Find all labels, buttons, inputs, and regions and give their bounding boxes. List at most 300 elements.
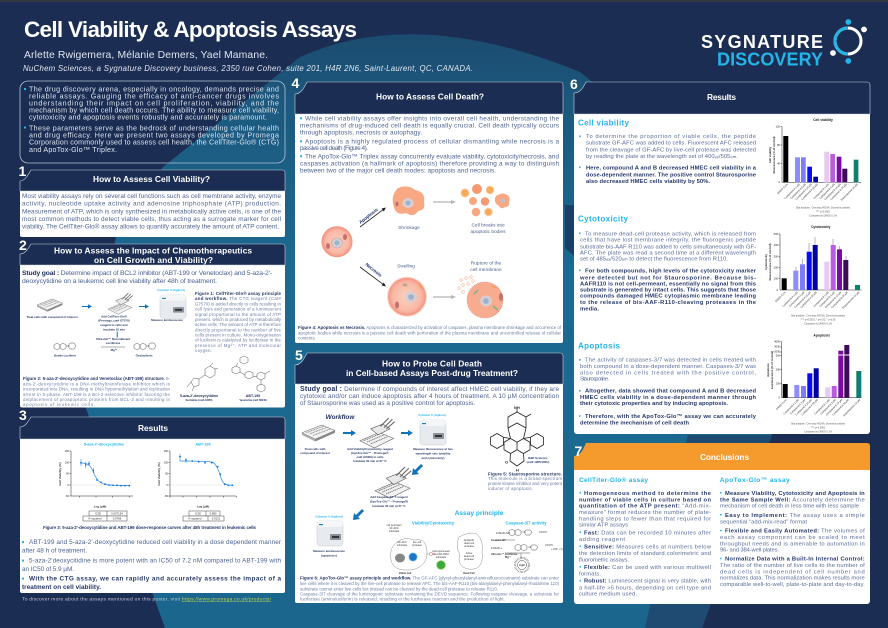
cytotoxicity text: AFC. The plate was read a second time at a different wavelength xyxy=(580,251,756,257)
cytotoxicity text xyxy=(579,231,757,312)
apoptosis text xyxy=(579,358,757,426)
figure 4 caption: contents. xyxy=(298,336,316,341)
bar chart: cytotoxicity: Compound B 1 µM xyxy=(813,291,830,308)
cell viability heading: Cell viability xyxy=(578,118,630,128)
authors: Arlette Rwigemera, Mélanie Demers, Yael Mamane. xyxy=(24,50,268,61)
bar chart: cell viability: 80 xyxy=(777,143,781,147)
gray arrow xyxy=(433,295,456,299)
bar chart: cytotoxicity: Staurosporine 10 µM xyxy=(842,291,860,310)
figure 1 caption: active cells. The amount of ATP is therefore xyxy=(195,322,282,327)
bar chart: cytotoxicity: Compared to DMSO 0.1% xyxy=(804,322,833,326)
panel 5 heading xyxy=(346,358,518,378)
assay principle heading: Assay principle xyxy=(455,510,504,517)
cytotoxicity text: For both compounds, high levels of the cytotoxicity marker xyxy=(585,268,757,274)
figure 1 caption: directly proportional to the number of live xyxy=(195,327,282,332)
logo wordmark: SYGNATURE xyxy=(701,32,823,52)
apotox-glo list: 96- and 384-well plates. xyxy=(720,548,779,554)
bar chart: apoptosis: Compound A 10 µM xyxy=(795,399,813,416)
panel 1 text xyxy=(22,193,281,231)
celltiter-glo list: Fast: Data can be recorded 10 minutes after xyxy=(584,530,711,536)
panel 4 text: passive cell death (Figure 4). xyxy=(300,145,368,152)
panel 1: how to assess cell viability xyxy=(18,163,285,237)
dead cell labels xyxy=(432,539,475,575)
panel 2 header xyxy=(20,244,285,265)
shrinkage label: Shrinkage xyxy=(398,225,420,231)
figure 1 caption: signal proportional to the amount of ATP xyxy=(195,312,281,317)
bar chart: apoptosis: Compound B 30 µM xyxy=(832,399,850,416)
structure labels: Venetoclax (cat# S8048) xyxy=(239,399,267,402)
panel 4: how to assess cell death xyxy=(292,75,563,343)
intro text: reliable assays. Gauging the efficacy of anti-cancer drugs involves xyxy=(29,93,279,101)
cytotoxicity text: to the release of bis-AAF-R110-cleaving proteases in the xyxy=(580,300,757,306)
live cell labels: GF-AFC xyxy=(389,527,399,530)
structure atoms xyxy=(505,405,520,472)
bar chart: apoptosis: 0 xyxy=(779,396,781,400)
celltiter-glo heading: CellTiter-Glo® assay xyxy=(579,476,648,484)
assay principle figure xyxy=(386,510,563,575)
robot icon xyxy=(108,293,133,314)
staurosporine structure xyxy=(490,405,549,472)
bar chart: cytotoxicity: DMSO 0.1% xyxy=(775,291,787,303)
figure 6 caption: substrate cannot enter live cells but instead can be cleaved by the dead-cell protease to release R110. xyxy=(300,587,498,592)
figure 1 caption: cell lysis and generation of a luminescent xyxy=(195,307,282,312)
step captions: (ApoTox-Glo™ - Promega®, xyxy=(351,451,389,455)
panel 2: impact of chemotherapeutics xyxy=(19,237,285,408)
structure labels: 5-aza-2'-deoxycytidine xyxy=(180,394,218,398)
live cell labels: substrate xyxy=(397,544,408,547)
bar chart: cell viability: 120 xyxy=(776,125,781,129)
bar chart: cell viability: Cell viability xyxy=(813,118,833,122)
cytotoxicity text: To measure dead-cell protease activity, which is released from xyxy=(585,231,756,237)
live cell labels: cell permeant xyxy=(386,524,402,527)
bar chart: apoptosis: 100 xyxy=(776,382,781,386)
figure 1 caption: presence of Mg²⁺, ATP and molecular xyxy=(195,343,282,348)
dead cell labels: substrate xyxy=(436,556,447,559)
bar chart: cell viability: Compound B 1 µM xyxy=(813,183,830,200)
bullet markers xyxy=(24,88,26,128)
panel 5 number: 5 xyxy=(295,347,303,363)
rupture label xyxy=(470,261,502,273)
figure 6 caption: Figure 6: ApoTox-Glo™ assay principle and workflow. The GF-AFC (glycyl-phenylalanyl-aminofluorocoumarin) substrate can enter xyxy=(300,576,560,580)
celltiter-glo list: fluorometric assays. xyxy=(579,557,629,563)
celltiter-glo list: adding reagent xyxy=(579,537,625,543)
apotox-glo list: The ratio of the number of live cells to the number of xyxy=(720,563,865,569)
step captions xyxy=(26,314,183,332)
bar chart: apoptosis: Stat analysis : One way ANOVA; Dunnett's posttest xyxy=(791,422,845,426)
arrow xyxy=(139,304,149,309)
chart: ABT-199 dose-response: 0.9131 xyxy=(212,517,221,521)
bar chart: cell viability: 0 xyxy=(779,180,781,184)
panel 2 heading: How to Assess the Impact of Chemotherapeutics xyxy=(54,246,252,256)
step captions: Add Caspase-3/7 ® reagent xyxy=(370,495,408,499)
bar chart: cell viability: Staurosporine 10 µM xyxy=(840,183,859,202)
figure 1 caption: of luciferin is catalyzed by luciferase in the xyxy=(195,338,282,343)
figure 6 caption: luciferase (aminoluciferin) is released, resulting in the luciferase reaction and the production of light. xyxy=(300,596,505,602)
structure labels xyxy=(180,394,267,402)
figure 6 caption: live cells where it is cleaved by the live-cell protease to release AFC. The bis-AAF-R110 (bis-alanylalanyl-phenylalanyl-rhodamine 110) xyxy=(300,581,560,586)
results bullets: ABT-199 and 5-aza-2'-deoxycytidine reduced cell viability in a dose dependent manner xyxy=(29,539,282,546)
results bullets xyxy=(22,539,282,591)
bar chart: apoptosis: Compound B 1 µM xyxy=(814,399,831,415)
bar chart: apoptosis: Compound B 3 µM xyxy=(820,399,837,415)
top edge xyxy=(0,0,888,2)
cell viability text xyxy=(579,134,757,185)
instrument icon xyxy=(420,420,446,445)
figure 2 caption: arrest in S-phase. ABT-199 is a Bcl-2-selective inhibitor favoring the xyxy=(23,392,171,397)
panel 4 header xyxy=(295,82,563,114)
panel 5 heading: in Cell-based Assays Post-drug Treatment? xyxy=(346,368,518,378)
celltiter-glo list: formats. xyxy=(579,571,601,577)
live cell labels: substrate xyxy=(389,530,400,533)
chart: ABT-199 dose-response: 50 xyxy=(165,472,169,476)
celltiter-glo list: the detection limits of standard colorimetric and xyxy=(579,551,711,557)
study goal xyxy=(300,386,559,407)
chart: 5-aza-2'-deoxycytidine dose-response: Cell Viability (%) xyxy=(58,462,62,486)
panel 4 number: 4 xyxy=(292,75,300,91)
dead cell labels: Apoptotic xyxy=(464,539,475,542)
bar chart: cytotoxicity: Compound B 30 µM xyxy=(831,291,849,309)
bar chart: cell viability: DMSO 0.1% xyxy=(777,183,789,195)
arrow xyxy=(343,430,356,436)
arrow xyxy=(401,430,413,436)
apotox-glo list: throughput needs and is amenable to automation in xyxy=(720,541,865,547)
figure 2 caption: aza-2'-deoxycytidine is a DNA methyltransferase inhibitor which is xyxy=(23,381,171,386)
structure labels: Decitabine (cat# A3656) xyxy=(186,399,213,402)
ruptured cell xyxy=(458,276,503,318)
chart: 5-aza-2'-deoxycytidine dose-response: 150 xyxy=(65,449,70,453)
study goal: deoxycytidine on a leukemic cell line viability after 48h of treatment. xyxy=(22,278,217,285)
panel 5: how to probe cell death xyxy=(295,347,563,603)
bar chart: cytotoxicity: Compound A 3 µM xyxy=(789,291,805,308)
bar chart: cytotoxicity: **** p<0.0001; * p<0.01; * p<0.05 xyxy=(800,318,836,322)
panel 1 text: activity, nucleotide uptake activity and adenosine triphosphate (ATP) production. xyxy=(22,201,281,208)
rupture label: Rupture of the xyxy=(471,261,502,267)
bar chart: cell viability: **** p<0.0001 xyxy=(816,210,831,214)
figure 1 caption: present, which is produced by metabolically xyxy=(195,317,282,322)
bar chart: apoptosis: Compound A 30 µM xyxy=(801,399,819,416)
logo ring xyxy=(835,28,861,54)
step captions: cat# G6320) to cells xyxy=(356,455,384,459)
luciferin reaction: Oxyluciferin xyxy=(136,354,153,358)
panel 1 text: viability. The CellTiter-Glo® assay allows to quantify accurately the amount of ATP content. xyxy=(22,223,279,231)
panel 7 number: 7 xyxy=(574,443,582,459)
cell viability text: To determine the proportion of viable cells, the peptide xyxy=(586,134,756,140)
chart: ABT-199 dose-response: 5.885 xyxy=(210,512,217,516)
chart: 5-aza-2'-deoxycytidine dose-response: 5-aza-2'-deoxycytidine xyxy=(84,442,124,446)
background right navy xyxy=(702,300,888,628)
caspase chemistry: Mg²⁺ xyxy=(505,555,511,559)
chart: 5-aza-2'-deoxycytidine dose-response: -50 xyxy=(65,494,70,498)
footer link line: To discover more about the assays mentioned on this poster, visit https://www.promega.co.uk/products/ xyxy=(22,596,272,602)
celltiter-glo list: Sensitive: Measures cells at numbers below xyxy=(584,544,712,550)
robot icon xyxy=(360,418,395,448)
step captions: Incubate 30 min at 37 °C xyxy=(372,504,407,508)
bar chart: cytotoxicity: 500 xyxy=(774,232,779,236)
dead cell labels: dead cell xyxy=(464,542,474,545)
results bullets: an IC50 of 5.9 µM. xyxy=(22,566,74,573)
apotox-glo list: comparable well-to-well, plate-to-plate and day-to-day. xyxy=(720,582,865,588)
logo dots xyxy=(830,19,867,64)
apotox-glo list: normalizes data. This normalization makes results more xyxy=(720,576,865,582)
figure 6 caption: Caspase-3/7 cleavage of the luminogenic substrate containing the DEVD sequence. Following caspase cleavage, a substrate for xyxy=(300,592,560,596)
panel 4 text: mechanisms of drug-induced cell death is equally crucial. Cell death typically occurs xyxy=(300,122,559,129)
panel 6 heading: Results xyxy=(707,92,736,102)
cytotoxicity text: cells that have lost membrane integrity, the fluorogenic peptide xyxy=(580,238,756,244)
intro text: cytotoxicity and apoptosis events robustly and accurately is paramount. xyxy=(29,114,267,122)
diagonal arrow 2 xyxy=(353,509,364,520)
step captions xyxy=(313,549,345,558)
bar chart: apoptosis: **** p<0.0001 xyxy=(811,426,826,430)
plate icon xyxy=(302,425,335,442)
panel 6 header xyxy=(574,82,870,114)
bar chart: cytotoxicity: Compound A 1 µM xyxy=(782,291,799,308)
chart: ABT-199 dose-response: Log (µM) xyxy=(197,504,209,508)
panel 2 heading: on Cell Growth and Viability? xyxy=(94,255,213,265)
step captions: Measure fluorescence at two xyxy=(413,447,453,451)
instrument icon xyxy=(317,521,343,546)
apoptotic bodies label xyxy=(471,222,506,235)
live cell labels: protease xyxy=(412,544,422,547)
figure 5 caption xyxy=(488,472,563,491)
step captions: wavelength sets (viability xyxy=(415,452,451,456)
apotox-glo list: mechanism of cell death in less time with less sample xyxy=(720,504,859,510)
panel 3 header xyxy=(20,417,285,439)
instrument label: Cytation 5 (Agilent) xyxy=(315,514,343,518)
panel 4 text: The ApoTox-Glo™ Triplex assay concurrently evaluate viability, cytotoxicity/necrosis, and xyxy=(305,153,559,160)
caspase chemistry xyxy=(491,529,563,572)
bar chart: cytotoxicity: Stat analysis : One way ANOVA; Dunnett's posttest xyxy=(791,314,845,318)
intro text: and ApoTox-Glo™ Triplex. xyxy=(29,146,117,154)
step captions: Measure luminescence xyxy=(151,318,183,322)
bar chart: cytotoxicity: 300 xyxy=(774,254,779,258)
step captions: (Promega, cat# G7570) xyxy=(98,319,130,323)
apotox-glo list: Measure Viability, Cytotoxicity and Apoptosis in xyxy=(725,491,865,497)
figure 5 caption: Figure 5: Staurosporine structure. xyxy=(488,472,562,476)
apotox-glo list: the Same Sample Well: Accurately determine the xyxy=(720,497,865,503)
bar chart: cell viability xyxy=(768,118,861,218)
workflow figure xyxy=(300,413,453,558)
apoptosis text: both compound in a dose-dependent manner. Caspases-3/7 was xyxy=(580,364,756,370)
workflow label: Workflow xyxy=(326,414,355,421)
apoptotic bodies label: apoptotic bodies xyxy=(471,229,506,235)
chart: ABT-199 dose-response: ABT-199 xyxy=(195,442,211,446)
step captions: (ApoTox-Glo™ - Promega®) xyxy=(370,500,408,504)
dead cell labels: dead-cell xyxy=(464,555,475,558)
structure labels: ABT-199 xyxy=(246,394,260,398)
bar chart: apoptosis: DMSO 0.1% xyxy=(776,398,788,411)
cell viability text: Here, compound A and B decreased HMEC cell viability in a xyxy=(586,166,757,172)
figure 6 caption xyxy=(300,576,560,602)
bar chart: apoptosis: 200 xyxy=(776,368,781,372)
intro text: Corporation commonly used to assess cell health, the CellTiter-Glo® (CTG) xyxy=(29,139,279,147)
luciferin reaction: Ultra-Glo™ Recombinant xyxy=(96,337,130,341)
figure 1 caption: G7570) is added directly to cells resulting in xyxy=(195,302,282,307)
cytotoxicity text: substrate is generated by intact cells. This suggests that those xyxy=(580,287,757,293)
apotox-glo list: Easy to Implement: The assay uses a simple xyxy=(725,513,865,519)
apotox-glo list: sequential “add-mix-read” format xyxy=(720,520,807,526)
cell viability text: by reading the plate at the wavelength set of 400ₑₓ/505ₑₘ. xyxy=(586,154,738,160)
bar chart: cell viability: Stat analysis : One way ANOVA; Dunnett's posttest xyxy=(796,206,850,210)
panel 2 heading xyxy=(54,246,252,265)
chart: 5-aza-2'-deoxycytidine dose-response: 100 xyxy=(65,461,70,465)
chart: ABT-199 dose-response: IC50 xyxy=(195,512,201,516)
plate icon xyxy=(37,299,62,312)
figure 4: apoptosis vs necrosis diagram xyxy=(322,184,510,318)
caspase chemistry: + ATP + O₂ xyxy=(551,548,563,551)
cytotoxicity text: media. xyxy=(580,306,599,312)
viability/cytotoxicity heading: Viability/Cytotoxicity xyxy=(412,520,455,526)
apoptosis text: also detected in cells treated with the positive control, xyxy=(580,370,756,376)
figure 2 caption xyxy=(23,376,171,407)
bar chart: apoptosis: 300 xyxy=(776,354,781,358)
bar chart: cytotoxicity: Compound B 3 µM xyxy=(819,291,836,308)
cell viability text: from the cleavage of GF-AFC by live-cell protease was detected xyxy=(586,147,756,153)
cytotoxicity heading: Cytotoxicity xyxy=(578,215,629,224)
panel 4 heading: How to Assess Cell Death? xyxy=(376,92,484,102)
study goal xyxy=(22,270,272,285)
panel 1 text: most common methods to detect viable cells, thus acting as a surrogate marker for cell xyxy=(22,216,281,223)
step captions: Add Viability/Cytotoxicity reagent xyxy=(347,447,393,451)
celltiter-glo list xyxy=(579,491,712,598)
study goal: of Staurosporine was used as a positive control for apoptosis. xyxy=(300,400,475,407)
chart: 5-aza-2'-deoxycytidine dose-response: Log (µM) xyxy=(94,504,106,508)
apotox-glo list: dead cells is independent of cell number and xyxy=(720,569,865,575)
step captions: Incubate 30 min at 37 °C xyxy=(353,459,388,463)
bar chart: cell viability: Compound A 10 µM xyxy=(795,183,813,201)
affiliation: NuChem Sciences, a Sygnature Discovery business, 2350 rue Cohen, suite 201, H4R 2N6, Saint-Laurent, QC, CANADA. xyxy=(23,64,473,73)
apoptosis arrow xyxy=(360,208,386,227)
dead cell labels: cell-impermeant xyxy=(432,550,450,553)
bar chart: cytotoxicity: 200 xyxy=(774,266,779,270)
chart: ABT-199 dose-response: 150 xyxy=(164,449,169,453)
bar chart: cell viability: Cell viability xyxy=(768,146,772,163)
caspase chemistry: COOH xyxy=(545,544,553,547)
caspase chemistry: Z-DEVD + xyxy=(491,547,503,550)
bar chart: cytotoxicity: Fluorescence (% of control) xyxy=(768,244,772,280)
structure atoms: NH xyxy=(514,405,520,410)
bar chart: cytotoxicity: Compound B 10 µM xyxy=(824,291,842,309)
panel 7 heading: Conclusions xyxy=(700,452,749,462)
logo wordmark line 2: DISCOVERY xyxy=(717,50,823,70)
bar chart: apoptosis: 3000 xyxy=(774,344,781,348)
structure atoms: H xyxy=(516,468,519,472)
panel 4 text xyxy=(300,115,559,174)
intro text: mechanism by which cell death occurs. The ability to measure cell viability, xyxy=(29,107,279,115)
step captions xyxy=(300,447,453,463)
caspase chemistry: Ultra-Glo™ Luciferase xyxy=(491,553,518,556)
panel 1 number: 1 xyxy=(18,163,26,179)
chart: 5-aza-2'-deoxycytidine dose-response: 50 xyxy=(66,472,70,476)
chart: ABT-199 dose-response: 0 xyxy=(167,483,169,487)
figure 2 caption: Figure 2: 5-aza-2'-deoxycytidine and Venetoclax (ABT-199) structure. 5- xyxy=(23,376,171,381)
chart: 5-aza-2'-deoxycytidine dose-response: 0.007154 xyxy=(111,512,123,516)
bar chart: apoptosis: Compound B 10 µM xyxy=(825,399,843,416)
chart: 5-aza-2'-deoxycytidine dose-response: R squared xyxy=(89,517,102,521)
figure 4 caption xyxy=(298,325,562,341)
chart: ABT-199 dose-response xyxy=(157,442,236,521)
bar chart: apoptosis xyxy=(766,334,862,434)
logo: Sygnature Discovery xyxy=(701,19,867,70)
panel 1 text: Most viability assays rely on several cell functions such as cell membrane activity, enzyme xyxy=(22,193,281,200)
step captions xyxy=(370,495,408,508)
step captions: Add CellTiter-Glo® xyxy=(101,314,128,318)
intro text xyxy=(29,86,279,154)
down arrow xyxy=(117,332,118,338)
luciferin reaction xyxy=(54,337,156,358)
bar chart: cell viability: Fluorescence (% of control) xyxy=(772,137,776,173)
luciferin reaction: Mg²⁺ xyxy=(111,348,118,352)
figure 1 caption: cells present in culture. Mono-oxygenation xyxy=(195,332,282,338)
step captions: Treat cells with xyxy=(305,447,326,451)
background lower-right shade xyxy=(645,435,772,628)
luciferin reaction: Luciferase xyxy=(106,341,121,345)
figure 2 structures xyxy=(180,356,270,402)
bar chart: cytotoxicity: Compound A 30 µM xyxy=(800,291,818,309)
bar chart: cell viability: Compound B 10 µM xyxy=(824,183,842,201)
necrosis label: Necrosis xyxy=(364,262,383,278)
panel 1 header xyxy=(20,170,285,191)
bar chart: apoptosis: Compound A 3 µM xyxy=(790,399,806,415)
dead cell labels: Active xyxy=(466,552,473,555)
caspase chemistry: Z-DEVD-NH xyxy=(496,532,510,535)
caspase chemistry: COOH xyxy=(539,531,547,534)
panel 6 number: 6 xyxy=(570,76,578,92)
structure atoms: O xyxy=(505,460,508,464)
live cell labels: Viable Cell xyxy=(399,572,412,575)
celltiter-glo list: Flexible: Can be used with various multiwell xyxy=(584,565,711,571)
panel 4 text: through apoptosis, necrosis or autophagy. xyxy=(300,129,422,136)
bar chart: cytotoxicity: 400 xyxy=(774,243,779,247)
cell viability text: dose-dependent manner. The positive control Staurosporine xyxy=(586,172,757,178)
figure 5 caption: protein kinase inhibitor and very potent xyxy=(488,481,563,486)
bar chart: apoptosis: Apoptosis xyxy=(766,363,770,377)
structure source: R&D Systems, xyxy=(528,456,548,460)
chart: 5-aza-2'-deoxycytidine dose-response: IC50 xyxy=(95,512,101,516)
celltiter-glo list: a half-life >5 hours, depending on cell type and xyxy=(579,585,711,591)
apoptosis text: their cytotoxic properties and by inducing apoptosis. xyxy=(580,401,728,407)
panel 4 text: While cell viability assays offer insights into overall cell health, understanding the xyxy=(305,115,559,122)
luciferin reaction: Beetle Luciferin xyxy=(54,354,76,358)
cytotoxicity text: substrate bis-AAF R110 was added to cells simultaneously with GF- xyxy=(580,245,756,251)
gray arrow xyxy=(433,200,456,204)
panel 4 text: caspases activation (a hallmark of apoptosis) therefore providing a way to distinguish xyxy=(300,160,559,167)
bar chart: cytotoxicity: 0 xyxy=(777,288,779,292)
bar chart: cell viability: 40 xyxy=(777,162,781,166)
diagonal arrow xyxy=(412,464,423,475)
figure 5 caption: inducer of apoptosis. xyxy=(488,486,533,491)
cytotoxicity text: AAFR110 is not cell-permeant, essentially no signal from this xyxy=(580,281,756,287)
bar chart: cytotoxicity: Compound A 10 µM xyxy=(794,291,812,309)
figure 2 caption: incorporated into DNA, resulting in DNA hypomethylation and replication xyxy=(23,387,171,392)
apoptotic bodies xyxy=(461,184,510,216)
study goal: cytotoxic and/or can induce apoptosis after 4 hours of treatment. A 10 µM concentration xyxy=(300,393,559,400)
instrument label: Cytation 5 (Agilent) xyxy=(418,413,446,417)
apoptosis text: HMEC cells viability in a dose-dependent manner through xyxy=(580,395,756,401)
arrow xyxy=(82,304,92,309)
light burst: Light xyxy=(519,564,525,567)
apotox-glo heading: ApoTox-Glo™ assay xyxy=(720,477,790,484)
intro text: understanding their impact on cell proliferation, viability, and the xyxy=(29,100,279,108)
panel 7 header xyxy=(574,443,870,470)
necrosis arrow xyxy=(360,267,386,286)
apotox-glo list: each assay component can be scaled to meet xyxy=(720,535,865,541)
bar chart: cytotoxicity: Cytotoxicity xyxy=(764,254,768,270)
intro text: These parameters serve as the bedrock of understanding cellular health xyxy=(29,124,279,132)
chart: ABT-199 dose-response: 100 xyxy=(164,461,169,465)
figure 2 caption: displacement of proapoptotic proteins from BCL-2 and resulting in xyxy=(23,397,171,402)
ABT-199 structure xyxy=(232,356,270,392)
bar chart: apoptosis: Compared to DMSO 0.1% xyxy=(804,430,833,434)
